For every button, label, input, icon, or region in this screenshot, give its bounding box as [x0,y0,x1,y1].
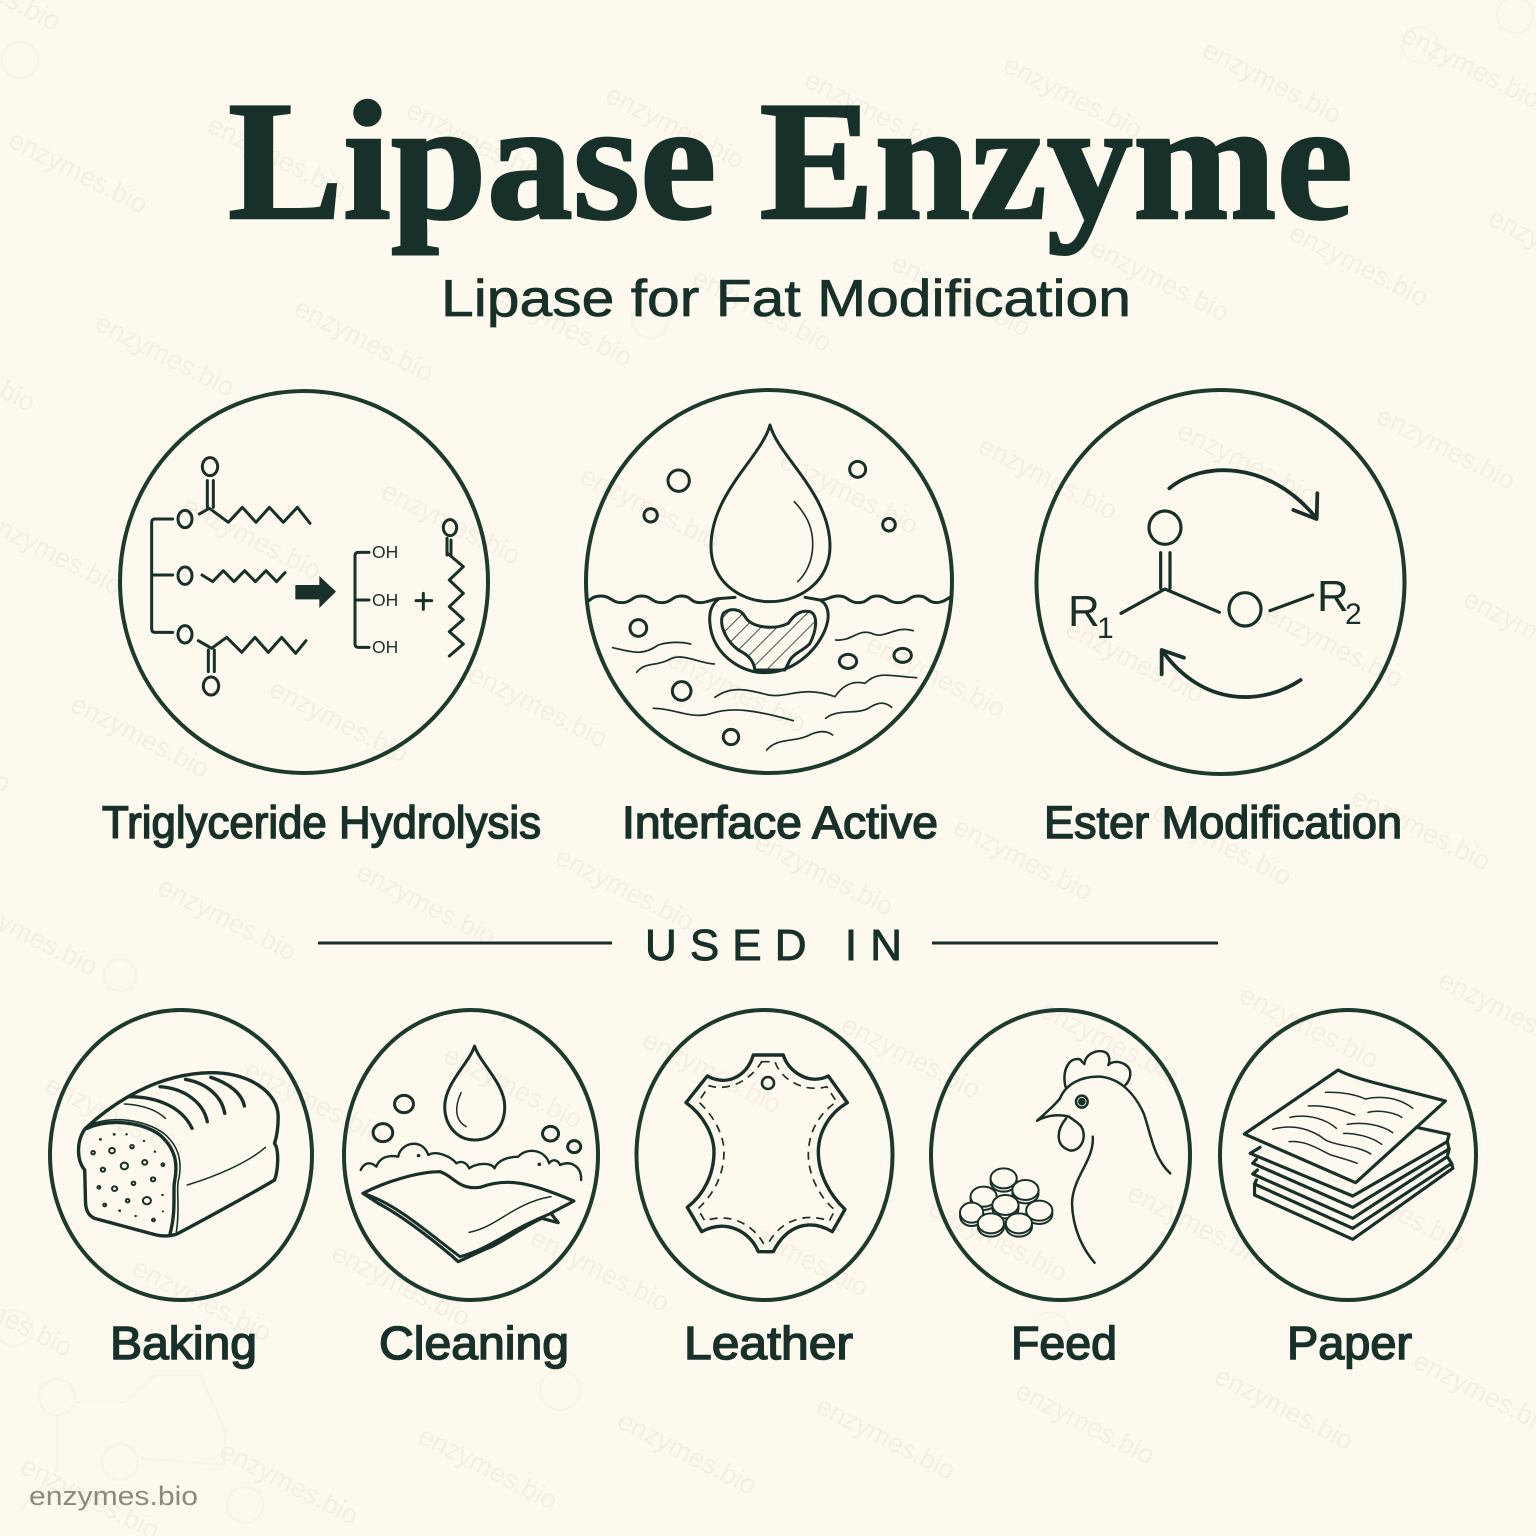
label: feed: Feed [1011,1317,1117,1369]
circle outline: baking [50,1010,312,1300]
watermark text: enzymes.bio [613,1405,761,1501]
watermark text: enzymes.bio [41,1069,189,1165]
circle outline: feed [931,1010,1190,1300]
circle outline: ester [1036,390,1404,774]
R group labels: R [1317,572,1349,621]
R group labels: 2 [1345,598,1362,631]
OH labels: OH [372,542,398,562]
OH labels [372,542,398,657]
panel: interface active [586,390,952,773]
watermark text: enzymes.bio [178,490,326,586]
watermark text: enzymes.bio [414,1420,562,1516]
circle outline: cleaning [344,1010,598,1300]
watermark text: enzymes.bio [750,826,898,922]
watermark text: enzymes.bio [402,94,550,190]
icon: oil droplet on enzyme at water interface [589,425,950,750]
circle outline: leather [636,1010,892,1300]
watermark text: enzymes.bio [439,1039,587,1135]
watermark text: enzymes.bio [1086,232,1234,328]
watermark text: enzymes.bio [352,856,500,952]
watermark text: enzymes.bio [66,688,214,784]
watermark text: enzymes.bio [812,1390,960,1486]
OH labels: OH [372,590,398,610]
watermark text: enzymes.bio [1036,994,1184,1090]
watermark text: enzymes.bio [1347,781,1495,877]
circle outline: hydrolysis [120,391,488,773]
watermark text: enzymes.bio [638,1024,786,1120]
R group labels: 1 [1097,612,1114,645]
watermark text: enzymes.bio [203,109,351,205]
watermark text: enzymes.bio [1285,217,1433,313]
watermark text: enzymes.bio [290,292,438,388]
R group labels: R [1068,587,1100,636]
watermark text: enzymes.bio [1061,613,1209,709]
subtitle: Lipase for Fat Modification [441,270,1131,328]
label: baking: Baking [110,1317,257,1369]
watermark text: enzymes.bio [91,307,239,403]
panel: ester modification [1036,390,1404,774]
watermark text: enzymes.bio [775,445,923,541]
watermark text: enzymes.bio [924,1192,1072,1288]
label: paper: Paper [1287,1317,1412,1369]
circle outline: paper [1220,1010,1476,1300]
watermark text: enzymes.bio [1148,796,1296,892]
icon: droplet foam and cloth [361,1046,581,1262]
watermark text: enzymes.bio [464,658,612,754]
watermark text: enzymes.bio [1173,415,1321,511]
watermark text: enzymes.bio [1210,1360,1358,1456]
section divider: used in: USED IN [645,921,902,970]
watermark text: enzymes.bio [999,49,1147,145]
watermark text: enzymes.bio [862,628,1010,724]
footer brand: enzymes.bio [29,1481,198,1511]
watermark text: enzymes.bio [526,1222,674,1318]
watermark text: enzymes.bio [215,1435,363,1531]
watermark text: enzymes.bio [800,64,948,160]
watermark text: enzymes.bio [1198,34,1346,130]
icon: leather hide [686,1055,847,1252]
watermark text: enzymes.bio [1011,1375,1159,1471]
watermark text: enzymes.bio [1260,598,1408,694]
watermark text: enzymes.bio [240,1054,388,1150]
watermark text: enzymes.bio [601,79,749,175]
panel: leather [636,1010,892,1300]
label: cleaning: Cleaning [379,1317,569,1369]
icon: chicken and feed pellets [960,1051,1170,1263]
watermark text: enzymes.bio [128,1252,276,1348]
title: Lipase Enzyme [228,67,1353,255]
label: ester modification: Ester Modification [1044,797,1402,848]
panel: cleaning [344,1010,598,1300]
watermark text: enzymes.bio [551,841,699,937]
icon: paper stack [1244,1070,1453,1239]
label: interface active: Interface Active [622,797,938,848]
panel: feed [931,1010,1190,1300]
watermark text: enzymes.bio [576,460,724,556]
watermark text: enzymes.bio [974,430,1122,526]
watermark text: enzymes.bio [327,1237,475,1333]
watermark text: enzymes.bio [489,277,637,373]
panel: paper [1220,1010,1476,1300]
icon: bread loaf [79,1073,278,1236]
circle outline: interface [586,390,952,773]
watermark text: enzymes.bio [377,475,525,571]
watermark text: enzymes.bio [663,643,811,739]
watermark text: enzymes.bio [887,247,1035,343]
panel: baking [50,1010,312,1300]
watermark text: enzymes.bio [265,673,413,769]
watermark text: enzymes.bio [949,811,1097,907]
watermark text: enzymes.bio [688,262,836,358]
R group labels [1068,572,1362,645]
icon: ester molecule with cycle arrows [1121,470,1317,697]
watermark text: enzymes.bio [725,1207,873,1303]
label: triglyceride hydrolysis: Triglyceride Hydrolysis [102,797,541,848]
icon: triglyceride reaction diagram [152,458,463,695]
watermark text: enzymes.bio [1372,400,1520,496]
watermark text: enzymes.bio [1123,1177,1271,1273]
watermark text: enzymes.bio [1235,979,1383,1075]
panel: triglyceride hydrolysis [120,391,488,773]
OH labels: OH [372,637,398,657]
label: leather: Leather [684,1317,853,1369]
watermark text: enzymes.bio [837,1009,985,1105]
watermark text: enzymes.bio [153,871,301,967]
watermark text: enzymes.bio [1322,1162,1470,1258]
watermark text: enzymes.bio [4,124,152,220]
